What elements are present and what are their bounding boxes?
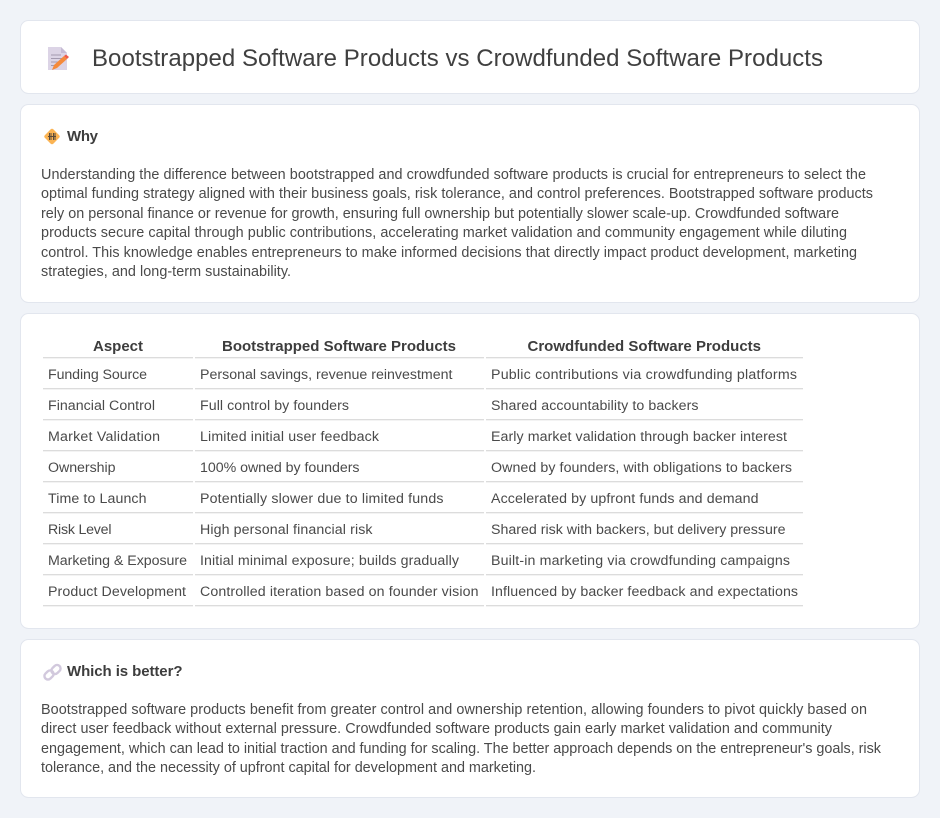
heading: why: Why: [67, 128, 99, 145]
column header: aspect: Aspect: [93, 338, 143, 355]
column header: crowdfunded: Crowdfunded Software Products: [528, 338, 761, 355]
row: market validation: Limited initial user feedback: [200, 429, 380, 445]
text block: why explanation: Understanding the difference between bootstrapped and crowdfunded software products is crucial for entrepreneurs to select the: [41, 167, 866, 183]
row: financial control: Financial Control: [48, 398, 155, 414]
text block: which is better explanation: engagement, which can lead to initial traction and funding for scaling. The better approach depends on the entrepreneur's goals, risk: [41, 741, 882, 757]
heading: which is better: Which is better?: [67, 663, 182, 680]
text block: why explanation: products secure capital through public contributions, accelerating market validation and community engagement while diluting: [41, 225, 847, 241]
row: market validation: Market Validation: [48, 429, 160, 445]
text block: why explanation: optimal funding strategy aligned with their business goals, risk tolerance, and control preferences. Bootstrapped software products: [41, 186, 873, 202]
panel: which is better: [20, 640, 920, 798]
title: Bootstrapped Software Products vs Crowdfunded Software Products: [92, 45, 823, 72]
row: risk level: Risk Level: [48, 522, 112, 538]
row: market validation: [48, 429, 787, 445]
icon: document with pencil: [48, 47, 69, 70]
icon: chain link: [43, 663, 62, 681]
row: product development: Controlled iteration based on founder vision: [200, 584, 478, 600]
row: product development: [48, 584, 798, 600]
row: product development: Product Development: [48, 584, 186, 600]
row: funding source: Funding Source: [48, 367, 147, 383]
row: risk level: Shared risk with backers, but delivery pressure: [491, 522, 786, 538]
row: time to launch: [48, 491, 758, 507]
row: marketing and exposure: Marketing & Exposure: [48, 553, 187, 569]
row: market validation: Early market validation through backer interest: [491, 429, 787, 445]
row: marketing and exposure: Initial minimal exposure; builds gradually: [200, 553, 460, 569]
row: risk level: High personal financial risk: [200, 522, 373, 538]
text block: which is better explanation: [41, 702, 882, 776]
panel: why: [20, 104, 920, 302]
text block: which is better explanation: tolerance, and the necessity of upfront capital for development and marketing.: [41, 760, 536, 776]
column header: bootstrapped: Bootstrapped Software Products: [222, 338, 456, 355]
panel: title header: [20, 20, 920, 94]
row: financial control: [48, 398, 698, 414]
row: time to launch: Potentially slower due to limited funds: [200, 491, 444, 507]
row: funding source: [48, 367, 797, 383]
text block: why explanation: strategies, and long-term sustainability.: [41, 264, 291, 280]
row: time to launch: Time to Launch: [48, 491, 146, 507]
row: risk level: [48, 522, 786, 538]
row: time to launch: Accelerated by upfront funds and demand: [491, 491, 758, 507]
icon: diamond sign: [44, 128, 60, 145]
text block: which is better explanation: Bootstrapped software products benefit from greater control and ownership retention, allowing founders to pivot quickly based on: [41, 702, 867, 718]
row: financial control: Shared accountability to backers: [491, 398, 698, 414]
row: ownership: Owned by founders, with obligations to backers: [491, 460, 792, 476]
row: financial control: Full control by founders: [200, 398, 349, 414]
panel: comparison table: [20, 314, 920, 628]
row: marketing and exposure: [48, 553, 790, 569]
row: marketing and exposure: Built-in marketing via crowdfunding campaigns: [491, 553, 790, 569]
text block: which is better explanation: direct user feedback without external pressure. Crowdfunded software products gain early market validation and community: [41, 721, 833, 737]
row: ownership: [48, 460, 792, 476]
row: ownership: 100% owned by founders: [200, 460, 360, 476]
text block: why explanation: rely on personal finance or revenue for growth, ensuring full ownership but potentially slower scale-up. Crowdfunded software: [41, 206, 839, 222]
row: funding source: Public contributions via crowdfunding platforms: [491, 367, 797, 383]
row: funding source: Personal savings, revenue reinvestment: [200, 367, 453, 383]
row: product development: Influenced by backer feedback and expectations: [491, 584, 798, 600]
row: ownership: Ownership: [48, 460, 116, 476]
text block: why explanation: control. This knowledge enables entrepreneurs to make informed decisions that directly impact product development, marketing: [41, 245, 857, 261]
text block: why explanation: [41, 167, 873, 280]
